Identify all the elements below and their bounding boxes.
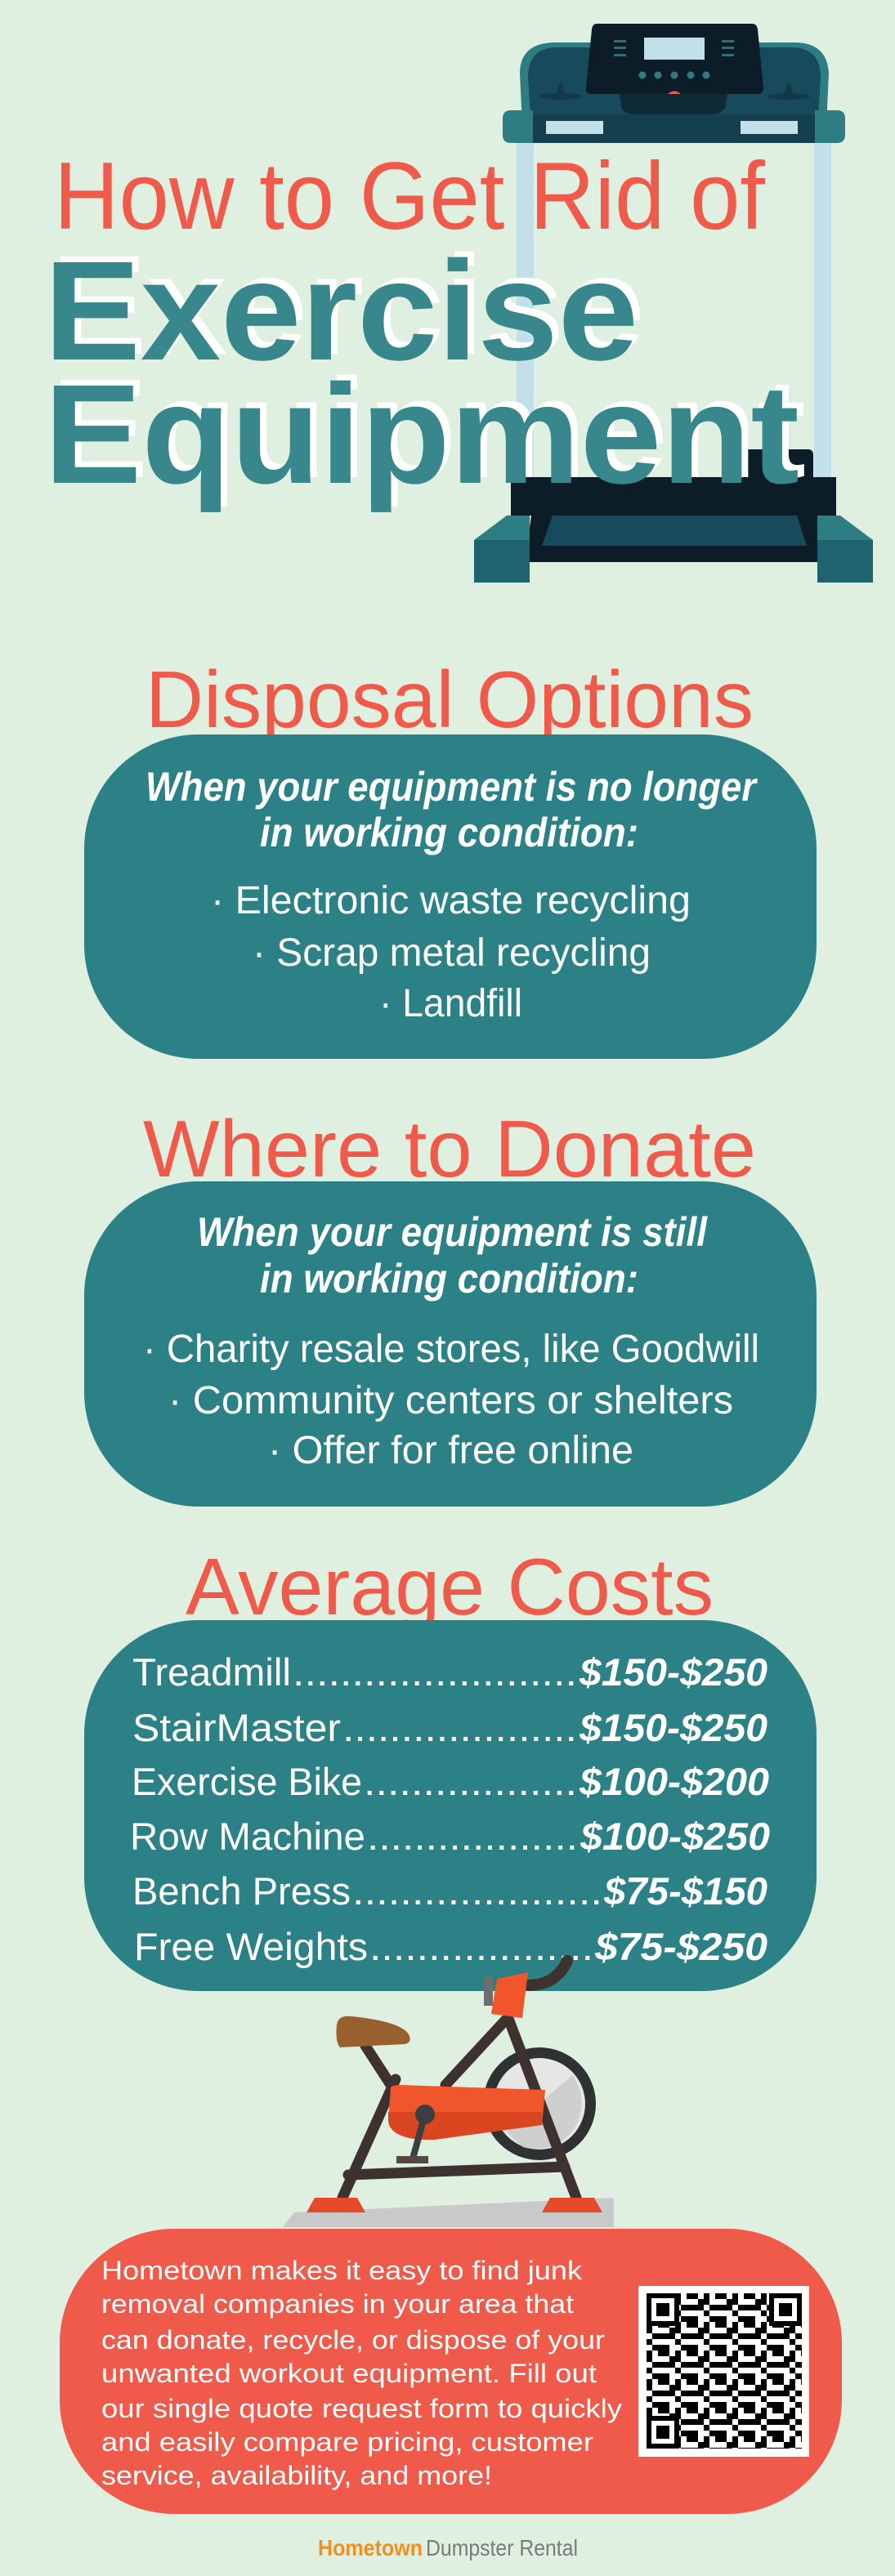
bullet list — [143, 1328, 759, 1472]
cost rows: StairMaster — [132, 1706, 341, 1749]
bullet list: · Charity resale stores, like Goodwill — [143, 1328, 759, 1371]
heading: Average Costs: Average Costs — [186, 1542, 714, 1632]
cost rows: Free Weights — [134, 1925, 368, 1968]
bullet list: · Community centers or shelters — [168, 1379, 733, 1422]
icon: exercise bike — [283, 1961, 614, 2227]
subtitle: When your equipment is no longer — [145, 764, 758, 810]
panel: call to action — [60, 2229, 842, 2514]
title line 2: Exercise — [44, 231, 638, 390]
heading: Disposal Options: Disposal Options — [145, 654, 754, 744]
cost rows: $75-$250 — [594, 1925, 767, 1968]
panel: average costs — [84, 1620, 817, 1991]
cost rows: $75-$150 — [603, 1869, 767, 1913]
title line 2: Exercise — [51, 225, 645, 384]
footer logo: Dumpster Rental — [426, 2535, 578, 2560]
footer logo: Hometown — [318, 2535, 423, 2560]
panel: where to donate — [84, 1181, 817, 1507]
bullet list: · Scrap metal recycling — [253, 931, 651, 975]
callout text: unwanted workout equipment. Fill out — [101, 2359, 597, 2388]
callout text — [101, 2256, 622, 2490]
QR code — [638, 2286, 809, 2457]
callout text: removal companies in your area that — [101, 2289, 574, 2319]
callout text: our single quote request form to quickly — [101, 2394, 622, 2423]
cost rows: .................. — [364, 1760, 577, 1803]
cost rows: ................... — [369, 1925, 593, 1968]
cost rows: $150-$250 — [579, 1650, 767, 1694]
panel: disposal options — [84, 734, 817, 1059]
cost rows: .................. — [367, 1815, 578, 1858]
cost rows: $150-$250 — [579, 1706, 767, 1749]
cost rows: .................... — [342, 1706, 577, 1749]
cost rows — [130, 1650, 770, 1968]
cost rows: Bench Press — [132, 1869, 351, 1913]
cost rows: ..................... — [352, 1869, 602, 1913]
title — [44, 142, 806, 513]
cost rows: Row Machine — [130, 1815, 365, 1858]
subtitle — [197, 1209, 708, 1301]
cost rows: $100-$250 — [580, 1815, 770, 1858]
cost rows: ........................ — [293, 1650, 577, 1694]
title line 1: How to Get Rid of — [54, 142, 765, 249]
callout text: can donate, recycle, or dispose of your — [101, 2325, 605, 2355]
bullet list: · Landfill — [379, 982, 522, 1025]
callout text: Hometown makes it easy to find junk — [101, 2256, 583, 2285]
subtitle: When your equipment is still — [197, 1209, 708, 1255]
cost rows: $100-$200 — [579, 1760, 769, 1803]
subtitle: in working condition: — [260, 810, 638, 855]
footer logo — [318, 2535, 578, 2560]
subtitle — [145, 764, 758, 855]
icon: treadmill — [474, 24, 873, 583]
title line 3: Equipment — [44, 355, 799, 513]
callout text: service, availability, and more! — [101, 2461, 492, 2490]
bullet list: · Electronic waste recycling — [211, 879, 691, 922]
heading: Where to Donate: Where to Donate — [143, 1104, 756, 1194]
cost rows: Treadmill — [132, 1650, 291, 1694]
bullet list — [211, 879, 691, 1025]
cost rows: Exercise Bike — [132, 1760, 362, 1803]
bullet list: · Offer for free online — [268, 1429, 633, 1472]
title line 3: Equipment — [51, 349, 806, 507]
callout text: and easily compare pricing, customer — [101, 2427, 593, 2457]
subtitle: in working condition: — [260, 1256, 638, 1301]
